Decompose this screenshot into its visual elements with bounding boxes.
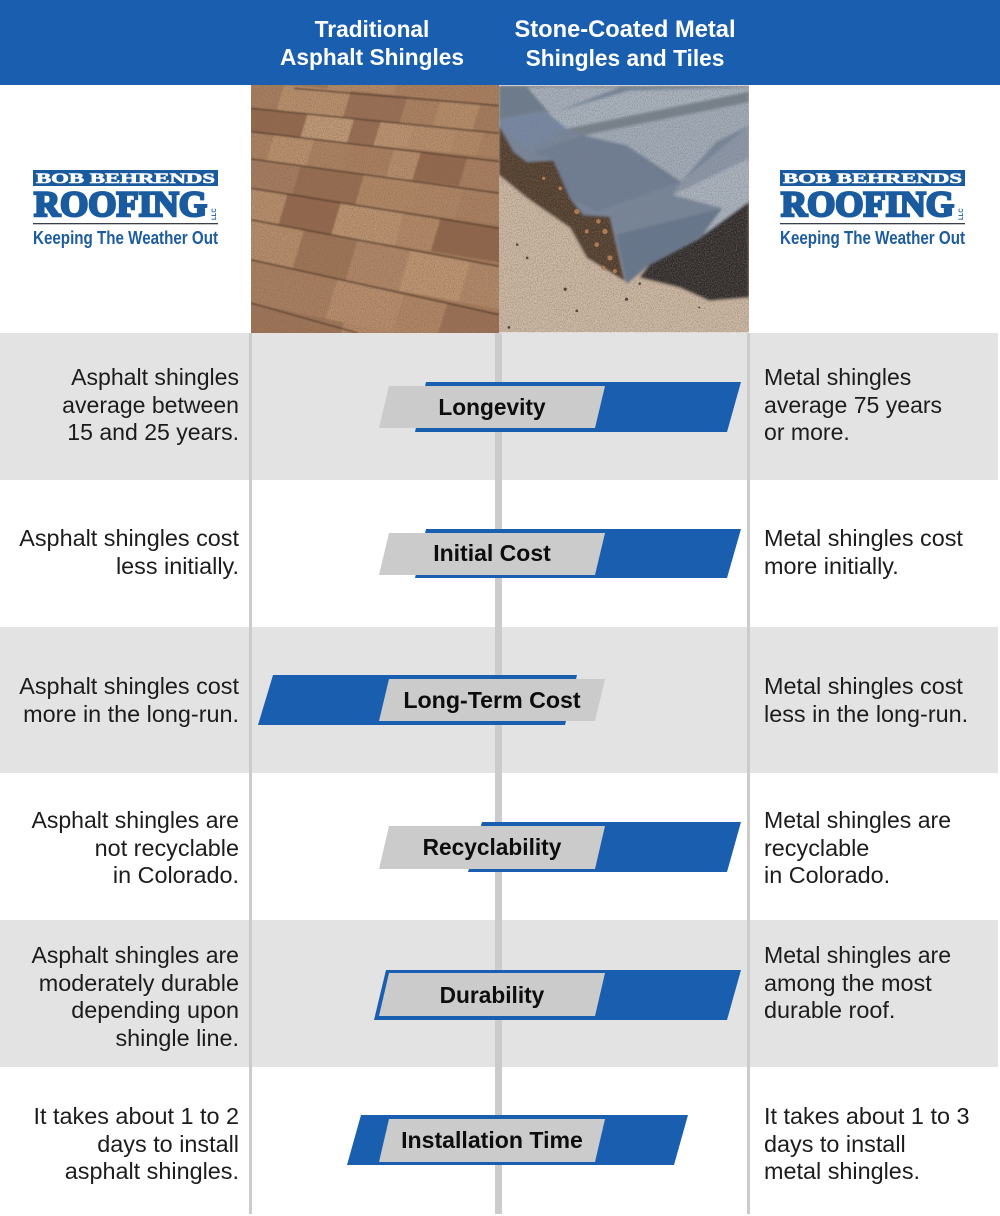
logo: right	[780, 170, 965, 248]
bar: long-term cost	[258, 675, 605, 725]
right text: initial cost: more initially.	[764, 553, 899, 579]
right text: long-term cost	[764, 673, 968, 727]
left text: durability: shingle line.	[115, 1025, 239, 1051]
left text: recyclability: Asphalt shingles are	[31, 807, 239, 833]
photo: asphalt shingles	[251, 85, 499, 333]
right text: initial cost: Metal shingles cost	[764, 525, 963, 551]
right text: installation time: metal shingles.	[764, 1158, 920, 1184]
left text: initial cost	[19, 525, 239, 579]
logo: left: BOB BEHRENDS	[36, 171, 215, 187]
left text: longevity: average between	[62, 392, 239, 418]
right text: durability: durable roof.	[764, 997, 895, 1023]
right text: longevity: average 75 years	[764, 392, 942, 418]
right text: recyclability: in Colorado.	[764, 862, 890, 888]
right text: initial cost	[764, 525, 963, 579]
bar: recyclability	[379, 822, 741, 872]
row band: long-term cost	[0, 627, 998, 773]
bar: durability	[374, 970, 741, 1020]
left text: recyclability: in Colorado.	[113, 862, 239, 888]
bar: installation time	[347, 1115, 688, 1165]
photo: stone-coated metal	[499, 86, 749, 332]
heading: traditional asphalt shingles: Asphalt Shingles	[280, 44, 464, 70]
bar: recyclability: Recyclability	[423, 834, 562, 860]
logo: right: ROOFING	[781, 184, 954, 224]
bar: installation time: Installation Time	[401, 1127, 583, 1153]
right text: durability: among the most	[764, 970, 932, 996]
right text: recyclability: recyclable	[764, 835, 869, 861]
right text: longevity	[764, 364, 942, 445]
bar: initial cost	[379, 529, 741, 578]
granule specks on torn edge	[542, 177, 617, 273]
left text: initial cost: Asphalt shingles cost	[19, 525, 239, 551]
left text: installation time: days to install	[97, 1131, 239, 1157]
left text: installation time: It takes about 1 to 2	[34, 1103, 239, 1129]
heading: traditional asphalt shingles	[280, 16, 464, 70]
left text: durability: moderately durable	[39, 970, 239, 996]
logo: left: ROOFING	[34, 184, 207, 224]
left text: installation time	[34, 1103, 239, 1184]
left text: installation time: asphalt shingles.	[65, 1158, 239, 1184]
right text: durability	[764, 942, 951, 1023]
bar: long-term cost: Long-Term Cost	[403, 687, 581, 713]
right text: longevity: Metal shingles	[764, 364, 911, 390]
row band: durability	[0, 920, 998, 1067]
right text: long-term cost: Metal shingles cost	[764, 673, 963, 699]
row band: longevity	[0, 333, 998, 480]
left text: durability: Asphalt shingles are	[31, 942, 239, 968]
right text: installation time: days to install	[764, 1131, 906, 1157]
right text: installation time: It takes about 1 to 3	[764, 1103, 969, 1129]
logo: right: BOB BEHRENDS	[783, 171, 962, 187]
right text: longevity: or more.	[764, 419, 850, 445]
left text: long-term cost: more in the long-run.	[23, 701, 239, 727]
header bar	[0, 0, 1000, 85]
logo: left	[33, 170, 218, 248]
left text: long-term cost: Asphalt shingles cost	[19, 673, 239, 699]
left text: longevity: Asphalt shingles	[71, 364, 239, 390]
bar: longevity	[379, 382, 741, 432]
right text: recyclability	[764, 807, 951, 888]
left text: durability: depending upon	[71, 997, 239, 1023]
bar: initial cost: Initial Cost	[433, 540, 551, 566]
left text: longevity: 15 and 25 years.	[67, 419, 239, 445]
heading: stone-coated metal shingles: Shingles and Tiles	[526, 45, 724, 71]
bar: durability: Durability	[440, 982, 545, 1008]
right text: durability: Metal shingles are	[764, 942, 951, 968]
logo: right: LLC	[959, 208, 965, 220]
left text: initial cost: less initially.	[116, 553, 239, 579]
right text: installation time	[764, 1103, 969, 1184]
left text: longevity	[62, 364, 239, 445]
heading: traditional asphalt shingles: Traditional	[315, 16, 429, 42]
logo: left: LLC	[212, 208, 218, 220]
right text: long-term cost: less in the long-run.	[764, 701, 968, 727]
heading: stone-coated metal shingles: Stone-Coated Metal	[514, 17, 736, 43]
left text: recyclability	[31, 807, 239, 888]
right text: recyclability: Metal shingles are	[764, 807, 951, 833]
left text: recyclability: not recyclable	[95, 835, 239, 861]
heading: stone-coated metal shingles	[514, 17, 736, 71]
left text: long-term cost	[19, 673, 239, 727]
left text: durability	[31, 942, 239, 1051]
bar: longevity: Longevity	[438, 394, 546, 420]
